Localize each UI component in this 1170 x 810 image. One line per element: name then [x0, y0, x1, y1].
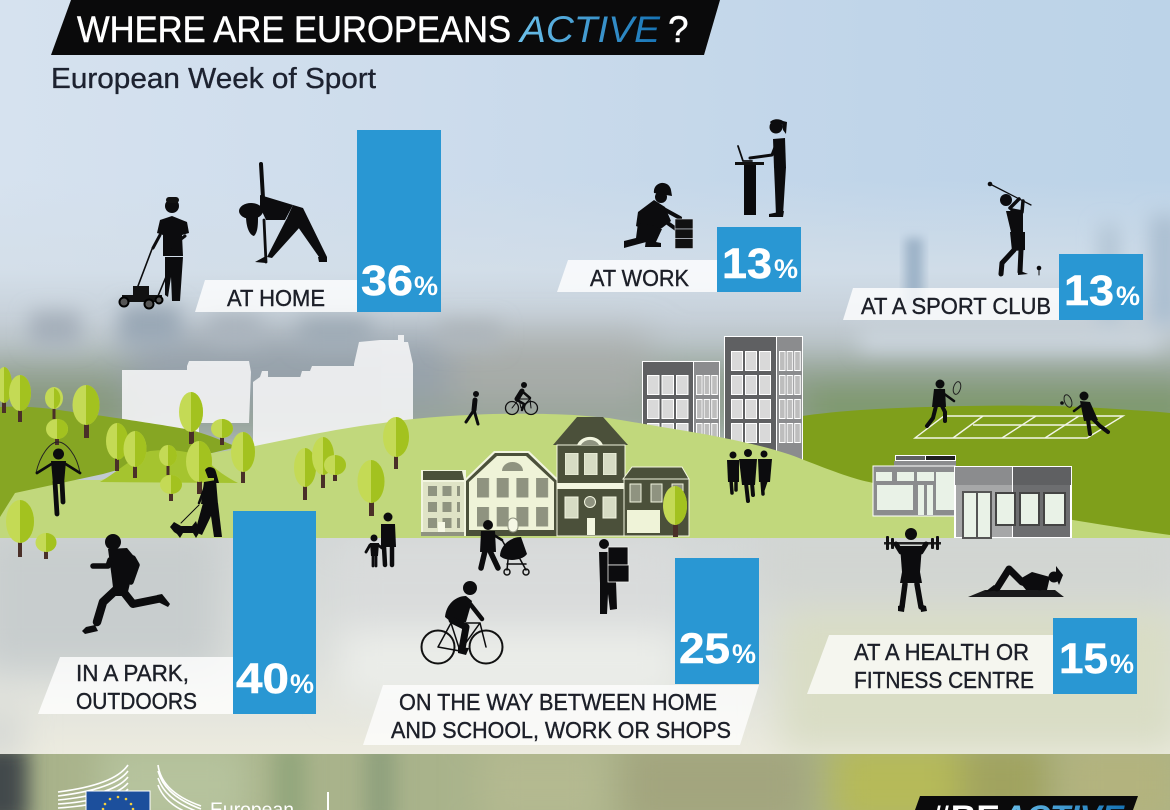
light green main hill — [0, 414, 1170, 538]
stat: health or fitness centre: 15 — [1059, 635, 1108, 683]
woman with stroller — [480, 520, 529, 575]
woman doing sit-ups on mat — [968, 566, 1064, 597]
stat: on the way: ON THE WAY BETWEEN HOME — [399, 689, 717, 715]
label: at a sport club — [843, 288, 1059, 320]
mid green left slope — [100, 450, 238, 483]
stat: on the way — [363, 558, 759, 745]
construction worker kneeling — [624, 183, 693, 248]
man with lawnmower — [120, 197, 189, 308]
bar: 36% — [357, 130, 441, 312]
bar: 25% — [675, 558, 759, 684]
bar: 13% club — [1059, 254, 1143, 320]
stat: on the way: % — [732, 639, 756, 669]
adult and child walking — [366, 512, 396, 566]
dog — [170, 521, 199, 538]
stat: at work: 13 — [722, 240, 772, 288]
stat: at work — [557, 227, 801, 292]
trees — [0, 367, 409, 559]
label: at home — [195, 280, 357, 312]
stat: at home: 36 — [361, 257, 413, 305]
hashtag banner — [915, 796, 1138, 810]
right gym unit — [954, 466, 1072, 538]
woman walking dog — [170, 467, 222, 538]
footer divider — [327, 792, 329, 810]
apartment buildings — [642, 336, 803, 481]
house: low dark — [623, 467, 689, 536]
stat: health or fitness centre: FITNESS CENTRE — [854, 667, 1034, 693]
EU flag — [86, 791, 150, 810]
stat: in a park: % — [290, 669, 314, 699]
dark green tennis hill — [760, 406, 1170, 537]
title text: WHERE ARE EUROPEANS — [77, 9, 511, 50]
woman at standing desk — [735, 119, 787, 217]
three runners — [727, 449, 772, 501]
stat: at a sport club: % — [1116, 281, 1140, 311]
stat: on the way: 25 — [679, 625, 730, 673]
label: in a park — [38, 657, 233, 714]
label: at work — [557, 260, 717, 292]
fitness centre buildings — [873, 455, 1072, 538]
stat: at home: AT HOME — [227, 285, 325, 311]
white background houses — [122, 335, 413, 450]
small cyclist on hill — [506, 382, 538, 414]
stat: at home — [195, 130, 441, 312]
tennis player left — [927, 380, 962, 426]
cyclist — [422, 581, 502, 664]
blurred footer photo — [0, 754, 1170, 810]
label: health or fitness — [807, 635, 1053, 694]
stat: at a sport club: 13 — [1064, 267, 1114, 315]
house: tall dark — [553, 417, 628, 536]
stat: at a sport club — [843, 254, 1143, 320]
bar: 40% — [233, 511, 316, 714]
stat: in a park: OUTDOORS — [76, 688, 197, 714]
stat: in a park: IN A PARK, — [76, 660, 189, 686]
stat: on the way: AND SCHOOL, WORK OR SHOPS — [391, 717, 731, 743]
stat: health or fitness centre: % — [1110, 649, 1134, 679]
weightlifter — [884, 528, 941, 612]
town houses — [421, 417, 689, 537]
person skipping with rope — [36, 442, 80, 514]
stat: at a sport club: AT A SPORT CLUB — [861, 293, 1051, 319]
person carrying boxes — [599, 539, 629, 614]
stat: health or fitness centre: AT A HEALTH OR — [854, 639, 1029, 665]
label: on the way — [363, 685, 759, 745]
walking person on hill — [466, 391, 479, 424]
European Commission logo — [58, 765, 294, 810]
house: small beige — [421, 470, 466, 536]
stat: in a park — [38, 511, 316, 714]
left gym unit — [873, 455, 956, 516]
stat: health or fitness centre — [807, 618, 1137, 694]
tree in front of houses — [663, 486, 687, 537]
stat: in a park: 40 — [236, 655, 289, 703]
woman in yoga triangle pose — [239, 164, 327, 263]
stat: at work: AT WORK — [590, 265, 690, 291]
title banner — [51, 0, 720, 55]
bar: 13% work — [717, 227, 801, 292]
title question mark: ? — [668, 9, 689, 50]
stat: at home: % — [414, 271, 438, 301]
bar: 15% — [1053, 618, 1137, 694]
golfer — [988, 182, 1041, 275]
tennis court — [915, 416, 1123, 438]
runner — [82, 534, 170, 634]
house: large cream — [464, 451, 559, 536]
dark green left hill — [0, 407, 237, 517]
blurred foreground band — [0, 538, 1170, 754]
stat: at work: % — [774, 254, 798, 284]
subtitle: European Week of Sport — [51, 63, 376, 95]
title highlighted word: ACTIVE — [518, 9, 661, 50]
tennis player right — [1060, 392, 1108, 434]
